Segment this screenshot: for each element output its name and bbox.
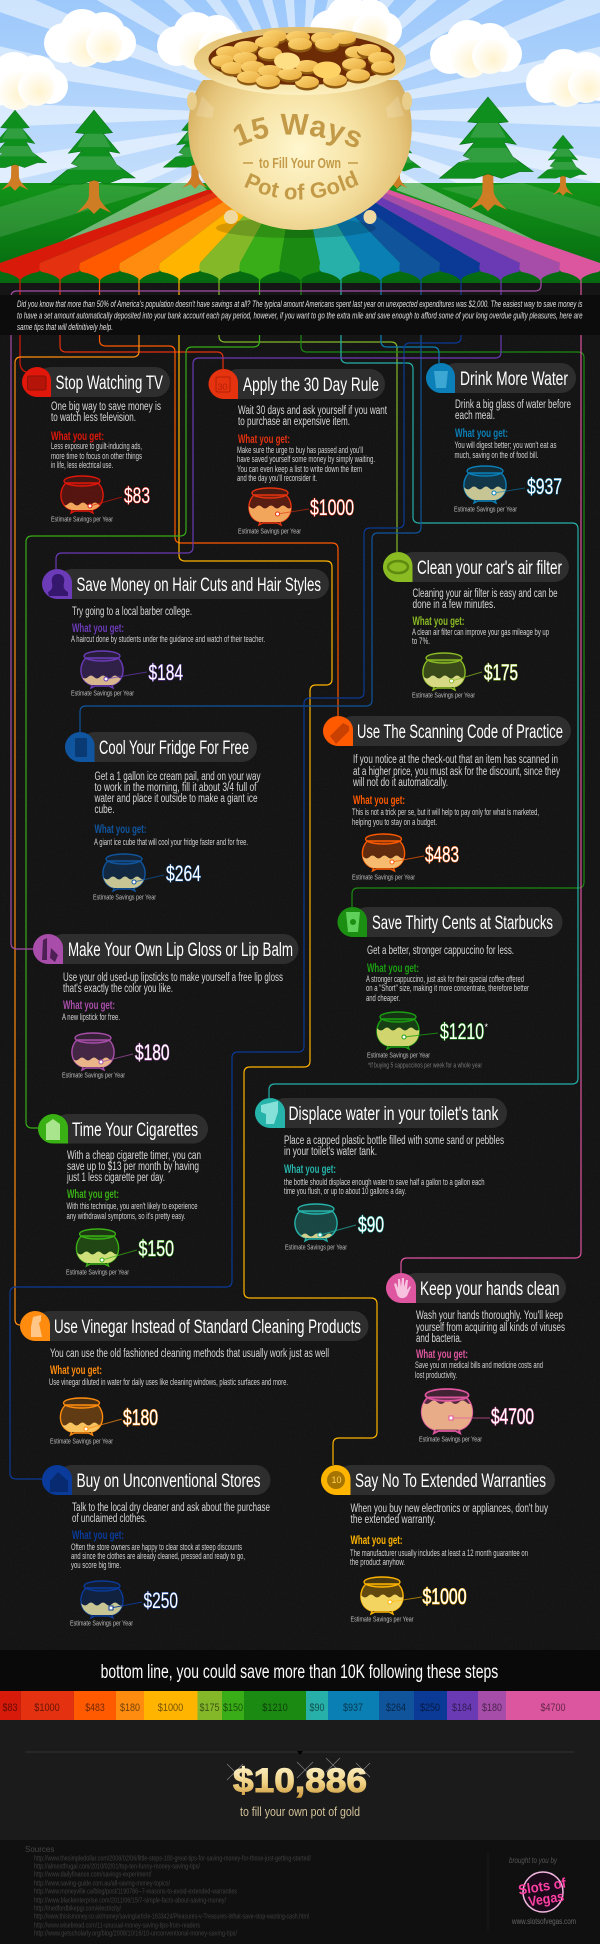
what you get: helping you to stay on a budget. — [352, 817, 437, 827]
caption: Estimate Savings per Year — [350, 1614, 414, 1624]
savings stacked bar: $250 — [420, 1702, 440, 1714]
body text — [72, 1502, 270, 1525]
savings stacked bar: $1000 — [158, 1702, 183, 1714]
caption: Estimate Savings per Year — [412, 690, 475, 700]
body text: just 1 less cigarette per day. — [66, 1172, 165, 1184]
body text: water and place it outside to make a giant ice — [94, 793, 257, 805]
savings stacked bar: $4700 — [540, 1702, 566, 1714]
pointer — [390, 856, 424, 864]
body text: Place a capped plastic bottle filled with some sand or pebbles — [284, 1135, 504, 1147]
sources list: http://www.thisismoney.co.uk/money/saving/article-1633424/Pleasures-v-Treasures-What-save-stop-wasting-cash.html — [34, 1914, 309, 1920]
price: $483 — [425, 842, 459, 867]
what you get: much, saving on the of food bill. — [454, 450, 538, 460]
header pill: Cool Your Fridge For Free — [99, 738, 249, 759]
header pill — [255, 1098, 507, 1128]
total caption: to fill your own pot of gold — [240, 1804, 360, 1819]
price: $1000 — [422, 1584, 466, 1609]
header pill: Time Your Cigarettes — [72, 1120, 198, 1141]
what you get — [66, 1189, 198, 1221]
savings stacked bar: $83 — [2, 1702, 18, 1714]
header pill: Make Your Own Lip Gloss or Lip Balm — [68, 940, 293, 961]
what you get — [71, 1530, 245, 1570]
tip: Say No To Extended Warranties — [321, 1465, 555, 1634]
what you get: A new lipstick for free. — [62, 1012, 120, 1022]
pointer — [109, 1602, 142, 1610]
what you get: What you get: — [63, 1000, 115, 1012]
body text — [94, 771, 261, 816]
price: $1000 — [310, 495, 354, 520]
body text: to work in the morning, fill it about 3/4 full of — [94, 782, 257, 794]
sources list: http://www.getscholarly.org/blog/2008/10/16/10-unconventional-money-saving-tips/ — [34, 1930, 237, 1938]
body text — [455, 399, 571, 422]
header pill — [22, 367, 170, 397]
what you get: more time to focus on other things — [51, 451, 142, 461]
line: scanning code — [100, 278, 338, 716]
body text: Use your old used-up lipsticks to make yourself a free lip gloss — [63, 972, 283, 984]
body text: With a cheap cigarette timer, you can — [67, 1150, 201, 1162]
tip: Buy on Unconventional Stores — [42, 1465, 270, 1642]
bottom line heading band — [0, 1650, 600, 1691]
savings stacked bar: $264 — [386, 1702, 406, 1714]
price: $250 — [144, 1588, 178, 1613]
body text: and bacteria. — [416, 1333, 462, 1345]
what you get — [352, 795, 539, 827]
header pill: Save Money on Hair Cuts and Hair Styles — [76, 575, 321, 596]
what you get: the product anyhow. — [350, 1557, 405, 1567]
header pill: Buy on Unconventional Stores — [76, 1471, 260, 1492]
body text — [284, 1135, 504, 1158]
tip: Make Your Own Lip Gloss or Lip Balm — [33, 934, 298, 1079]
what you get: any withdrawal symptoms, so it's pretty easy. — [66, 1211, 186, 1221]
savings stacked bar: $150 — [223, 1702, 243, 1714]
tip: Time Your Cigarettes — [38, 1114, 208, 1291]
footer — [0, 1840, 600, 1944]
body text — [412, 588, 558, 611]
intro band: same tips that will definitively help. — [17, 322, 113, 333]
what you get: What you get: — [350, 1535, 402, 1547]
price: $180 — [135, 1040, 170, 1065]
what you get: and the day you'll reconsider it. — [237, 473, 317, 483]
tip: Save Money on Hair Cuts and Hair Styles — [42, 569, 329, 697]
body text: You can use the old fashioned cleaning methods that usually work just as well — [50, 1348, 329, 1360]
body text: will not do it automatically. — [352, 777, 448, 789]
pot: $83 — [60, 475, 104, 514]
body text — [350, 1503, 548, 1526]
body text — [238, 405, 388, 428]
sources list — [25, 1845, 311, 1938]
pot: $937 — [463, 465, 507, 504]
pot: $250 — [80, 1580, 124, 1620]
header pill — [20, 1311, 368, 1341]
what you get: A giant ice cube that will cool your fridge faster and for free. — [94, 837, 248, 847]
what you get: to 7%. — [412, 636, 430, 646]
website: www.slotsofvegas.com — [511, 1917, 576, 1926]
pointer — [388, 1597, 422, 1604]
pointer — [84, 1419, 122, 1431]
price: $264 — [166, 861, 201, 886]
pot: $264 — [102, 853, 146, 892]
header pill — [321, 1465, 555, 1495]
body text: of unclaimed clothes. — [72, 1513, 147, 1525]
total amount: $10,886 — [233, 1762, 367, 1800]
body text: cube. — [94, 804, 114, 816]
what you get — [71, 623, 265, 644]
body text: One big way to save money is — [51, 401, 161, 413]
what you get — [350, 1535, 528, 1567]
line: 30 day rule — [60, 278, 223, 369]
header pill: 10 — [332, 1475, 342, 1485]
savings stacked bar: $937 — [343, 1702, 363, 1714]
pointer — [318, 1225, 356, 1237]
logo: Slots of Vegas: Vegas — [527, 1888, 565, 1909]
caption: Estimate Savings per Year — [50, 1436, 113, 1446]
pot title: 15 Ways: 15 Ways — [234, 114, 361, 148]
what you get: What you get: — [50, 1365, 102, 1377]
pot: $1000 — [360, 1576, 404, 1616]
pot: $180 — [71, 1032, 115, 1072]
body text: save up to $13 per month by having — [67, 1161, 199, 1173]
caption: Estimate Savings per Year — [71, 688, 134, 698]
body text — [51, 401, 161, 424]
body text: to watch less television. — [51, 412, 136, 424]
what you get — [237, 434, 375, 483]
price: $184 — [148, 660, 183, 685]
pointer — [276, 509, 309, 516]
line: warranties — [179, 278, 377, 1465]
header pill: Apply the 30 Day Rule — [243, 375, 379, 396]
what you get: you score big time. — [71, 1560, 121, 1570]
pot: $4700 — [420, 1388, 474, 1435]
sources list: http://www.dailyfinance.com/savings-experiment/ — [34, 1872, 152, 1878]
what you get: in life, less electrical use. — [51, 460, 113, 470]
body text: the extended warranty. — [350, 1514, 436, 1526]
what you get: Use vinegar diluted in water for daily uses like cleaning windows, plastic surfaces and more. — [49, 1377, 288, 1387]
price: $1210 — [440, 1019, 484, 1044]
tip: Cool Your Fridge For Free — [65, 732, 261, 916]
pot: $150 — [76, 1228, 120, 1268]
price: * — [484, 1022, 488, 1032]
price: $175 — [484, 660, 518, 685]
header pill — [65, 732, 257, 762]
pointer — [492, 488, 525, 495]
tip: Displace water in your toilet's tank — [255, 1098, 507, 1251]
pot: $184 — [80, 650, 124, 690]
savings stacked bar: $180 — [120, 1702, 140, 1714]
pot title dashes — [243, 162, 358, 164]
what you get: With this technique, you aren't likely to experience — [66, 1201, 198, 1211]
price: $83 — [124, 483, 150, 508]
header pill — [42, 569, 329, 599]
what you get: What you get: — [353, 795, 405, 807]
what you get: What you get: — [367, 963, 419, 975]
what you get: What you get: — [67, 1189, 119, 1201]
what you get — [51, 431, 142, 470]
header pill — [426, 363, 576, 393]
body text: in your toilet's water tank. — [284, 1146, 377, 1158]
pointer — [132, 875, 164, 884]
caption: Estimate Savings per Year — [66, 1268, 129, 1276]
what you get — [49, 1365, 288, 1387]
tip: Save Thirty Cents at Starbucks — [338, 907, 562, 1070]
what you get — [366, 963, 529, 1003]
what you get — [94, 824, 248, 847]
line: hands — [401, 278, 581, 1273]
header pill — [38, 1114, 208, 1144]
pointer — [450, 672, 482, 683]
body text: Try going to a local barber college. — [72, 606, 192, 618]
line: hair — [56, 278, 501, 569]
caption: Estimate Savings per Year — [70, 1618, 133, 1628]
header pill: Stop Watching TV — [56, 373, 163, 394]
caption: Estimate Savings per Year — [367, 1050, 430, 1060]
what you get: What you get: — [412, 616, 464, 628]
what you get: have saved yourself some money by simply waiting. — [237, 454, 375, 464]
caption: *If buying 5 cappuccinos per week for a whole year — [368, 1062, 482, 1070]
what you get: Often the store owners are happy to clear stock at steep discounts — [71, 1542, 242, 1552]
line: unconventional stores — [10, 278, 461, 1479]
what you get: What you get: — [72, 1530, 124, 1542]
caption: Estimate Savings per Year — [419, 1434, 482, 1444]
header pill — [323, 716, 571, 746]
header pill — [383, 552, 569, 582]
sources list: http://medfordbikepgr.com/electricity/ — [34, 1906, 121, 1912]
pot: $90 — [294, 1203, 338, 1242]
savings stacked bar — [0, 1691, 600, 1720]
line: air filter — [219, 278, 397, 552]
line: water — [381, 278, 439, 363]
price: $4700 — [491, 1404, 534, 1429]
pot: $175 — [422, 652, 466, 692]
tip: Clean your car's air filter — [383, 552, 569, 715]
pot title: to Fill Your Own: to Fill Your Own — [259, 155, 341, 172]
total panel — [0, 1720, 600, 1840]
caption: Estimate Savings per Year — [285, 1242, 347, 1252]
caption: Estimate Savings per Year — [454, 504, 517, 514]
intro band — [0, 295, 600, 335]
body text — [63, 972, 283, 995]
what you get — [284, 1164, 484, 1196]
body text — [66, 1150, 201, 1184]
header pill — [338, 907, 562, 937]
tip: Use The Scanning Code of Practice — [323, 716, 571, 895]
pointer — [449, 1416, 490, 1420]
connector lines from rainbow to tips — [10, 278, 584, 1479]
header pill — [42, 1465, 270, 1495]
price: $180 — [123, 1405, 158, 1430]
line: lip gloss — [11, 278, 541, 949]
sources list: http://www.blackenterprise.com/2011/06/15/7-simple-facts-about-saving-money/ — [34, 1898, 226, 1904]
price: $90 — [358, 1212, 384, 1237]
pot of gold — [187, 27, 412, 230]
caption: Estimate Savings per Year — [62, 1070, 125, 1080]
what you get: Make sure the urge to buy has passed and you'll — [237, 445, 363, 455]
line: toilet — [269, 278, 578, 1098]
pointer — [88, 497, 122, 508]
line: vinegar — [15, 278, 139, 1325]
what you get: What you get: — [416, 1349, 468, 1361]
caption: Estimate Savings per Year — [352, 872, 415, 882]
what you get: What you get: — [94, 824, 146, 836]
pot body — [188, 80, 412, 230]
pointer — [100, 1250, 137, 1262]
price: $150 — [138, 1236, 174, 1261]
body text: done in a few minutes. — [412, 599, 496, 611]
caption: Estimate Savings per Year — [238, 526, 301, 536]
savings stacked bar: $483 — [85, 1702, 105, 1714]
tip: Stop Watching TV — [22, 367, 170, 523]
pot handles — [187, 92, 412, 118]
header scene: sky, clouds, trees, grass — [0, 0, 600, 283]
coins — [208, 30, 395, 90]
sources list: Sources — [25, 1845, 54, 1854]
pot title: Pot of Gold: Pot of Gold — [244, 170, 359, 200]
sources list: http://www.moneyville.ca/blog/post/1190786--7-reasons-to-avoid-extended-warranties — [34, 1888, 237, 1896]
header pill — [208, 369, 385, 399]
brought to you by: brought to you by — [509, 1855, 558, 1865]
what you get: A haircut done by students under the guidance and watch of their teacher. — [71, 634, 265, 644]
header pill: Displace water in your toilet's tank — [288, 1104, 499, 1125]
savings stacked bar: $175 — [200, 1702, 220, 1714]
caption — [367, 1050, 482, 1070]
tip: Drink More Water — [426, 363, 576, 526]
body text: that's exactly the color you like. — [63, 983, 173, 995]
pot: $483 — [362, 833, 406, 872]
body text: Wait 30 days and ask yourself if you want — [238, 405, 388, 417]
body text: Get a better, stronger cappuccino for less. — [367, 945, 514, 957]
what you get: Less exposure to guilt-inducing ads, — [51, 441, 142, 451]
caption: Estimate Savings per Year — [51, 514, 113, 524]
price: $937 — [527, 474, 562, 499]
tip: Keep your hands clean — [386, 1273, 566, 1448]
sources list: http://almostfrugal.com/2010/02/01/top-ten-funny-money-saving-tips/ — [34, 1864, 200, 1870]
body text: Get a 1 gallon ice cream pail, and on your way — [94, 771, 261, 783]
logo: Slots of Vegas — [517, 1872, 569, 1912]
what you get: What you get: — [284, 1164, 336, 1176]
header pill — [386, 1273, 566, 1303]
line: starbucks — [301, 278, 584, 907]
what you get: What you get: — [51, 431, 104, 443]
what you get: and cheaper. — [366, 993, 400, 1003]
pointer — [402, 1033, 438, 1039]
what you get: You can even keep a list to write down the item — [237, 464, 362, 474]
pot rim — [194, 27, 406, 95]
what you get: What you get: — [72, 623, 124, 635]
savings stacked bar: $90 — [310, 1702, 324, 1714]
what you get — [454, 428, 557, 460]
what you get — [415, 1349, 543, 1380]
header pill — [33, 934, 298, 964]
pot: $1210 — [376, 1011, 420, 1050]
what you get: time you flush, or up to about 10 gallons a day. — [284, 1186, 406, 1196]
body text — [416, 1310, 565, 1345]
line: fridge — [80, 278, 421, 732]
rainbow fan — [0, 190, 600, 280]
what you get — [62, 1000, 120, 1022]
what you get: lost productivity. — [415, 1370, 457, 1380]
body text: Talk to the local dry cleaner and ask about the purchase — [72, 1502, 270, 1514]
tip: Use Vinegar Instead of Standard Cleaning Products — [20, 1311, 368, 1445]
pointer — [99, 1054, 133, 1064]
body text: each meal. — [455, 410, 495, 422]
savings stacked bar: $180 — [482, 1702, 502, 1714]
caption: Estimate Savings per Year — [93, 892, 156, 902]
logo: Slots of Vegas: Slots of — [517, 1874, 567, 1898]
tip: Apply the 30 Day Rule — [208, 369, 388, 545]
body text — [352, 754, 560, 789]
what you get — [412, 616, 549, 646]
sources list: http://www.thesimpledollar.com/2008/02/06/little-steps-100-great-tips-for-saving-money-for-those-just-getting-started/ — [34, 1856, 311, 1862]
savings stacked bar: $1210 — [262, 1702, 288, 1714]
savings stacked bar: $184 — [452, 1702, 472, 1714]
pot: $180 — [60, 1397, 104, 1436]
sources list: http://www.wisebread.com/11-unusual-money-saving-tips-from-readers — [34, 1922, 200, 1930]
header pill: 30 — [218, 382, 228, 392]
what you get: What you get: — [455, 428, 508, 440]
pot feet — [224, 210, 376, 224]
pointer — [104, 672, 147, 681]
body text: to purchase an expensive item. — [238, 416, 350, 428]
savings stacked bar: $1000 — [34, 1702, 60, 1714]
what you get: What you get: — [238, 434, 290, 446]
line: cigarettes — [26, 278, 260, 1128]
sparkles — [227, 1758, 370, 1780]
what you get: and since the clothes are already cleaned, pressed and ready to go, — [71, 1551, 245, 1561]
header pill: Use Vinegar Instead of Standard Cleaning Products — [54, 1317, 361, 1338]
what you get: the bottle should displace enough water to save half a gallon to a gallon each — [284, 1177, 484, 1187]
line: TV — [20, 278, 26, 372]
pot: $1000 — [248, 487, 292, 526]
sources list: http://www.saving-guide.com.au/all-saving-money-topics/ — [34, 1880, 170, 1888]
